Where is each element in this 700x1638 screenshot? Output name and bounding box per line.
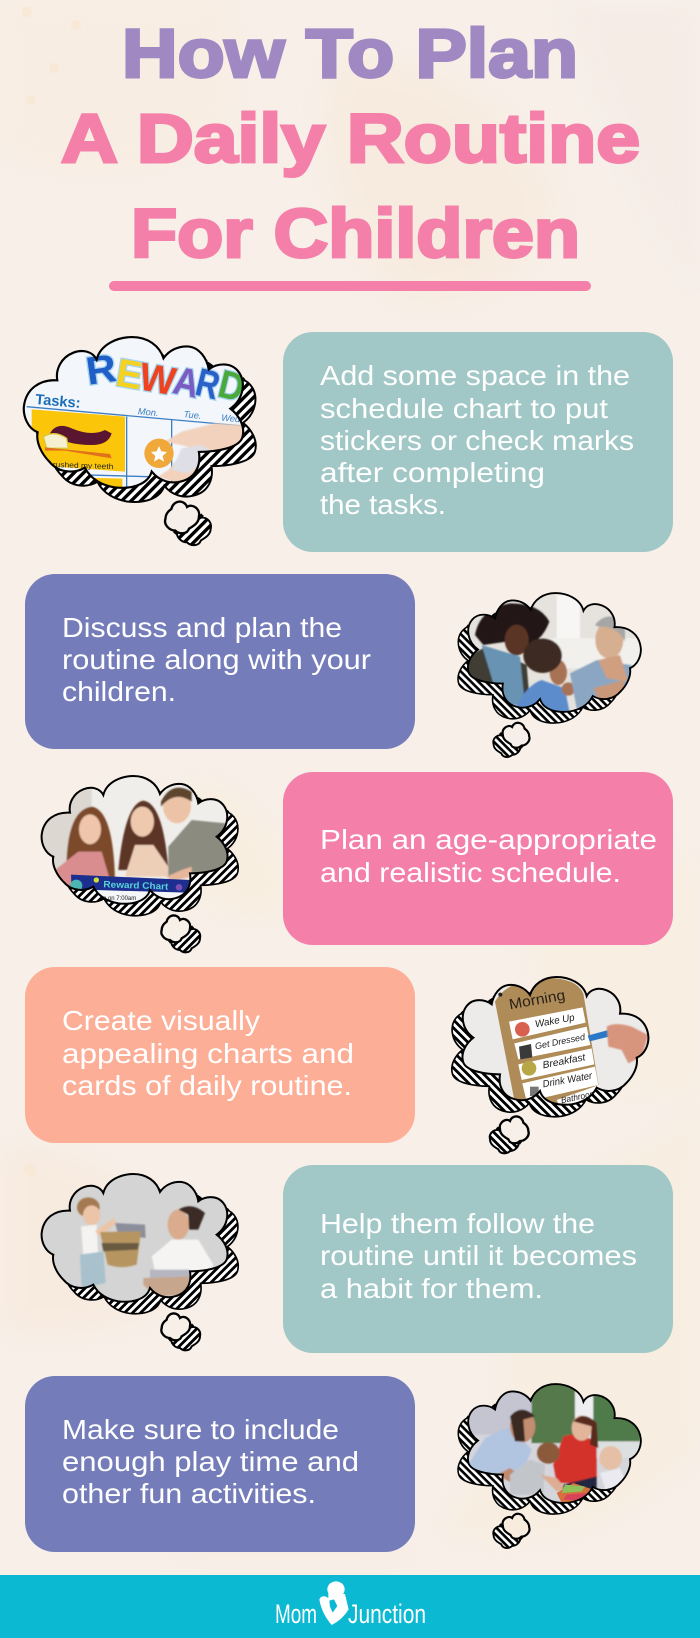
title (61, 15, 640, 291)
tip text: schedule chart to put (320, 393, 608, 424)
photo: family playing (468, 1385, 640, 1502)
tip text: children. (62, 676, 176, 707)
card (25, 1376, 415, 1552)
tip text: Make sure to include (62, 1414, 339, 1445)
logo icon: mother and child heart (319, 1581, 349, 1625)
tip text (62, 1005, 354, 1101)
panel: plan together tip (25, 574, 415, 749)
photo: reward chart: Tue. (183, 409, 202, 421)
tip text: Create visually (62, 1005, 260, 1036)
tip text (320, 1208, 637, 1304)
bubble shadow (52, 790, 240, 917)
panel: build a habit tip (283, 1165, 673, 1353)
tip text (62, 612, 371, 707)
photo: morning chart: Bathroom (560, 1088, 597, 1105)
tip text: enough play time and (62, 1446, 359, 1477)
photo: reward chart: I brushed my teeth (43, 460, 114, 471)
small thought cloud (160, 914, 202, 954)
small thought cloud (164, 500, 212, 546)
card (25, 574, 415, 749)
card (25, 967, 415, 1143)
photo: morning chart: Morning (508, 988, 566, 1013)
photo: morning chart: Drink Water (542, 1071, 594, 1090)
bubble outline (42, 776, 228, 904)
title line: A Daily Routine: A Daily Routine (61, 100, 640, 177)
panel: realistic schedule tip (283, 772, 673, 945)
small thought cloud (492, 1512, 531, 1549)
thought bubble: reward chart photo (22, 336, 257, 546)
panel: stickers tip (283, 332, 673, 552)
title line: For Children: For Children (131, 195, 580, 272)
photo: reward chart: E (113, 351, 146, 398)
thought bubble: morning routine card photo (450, 976, 650, 1154)
bubble shadow (36, 354, 257, 503)
tip text (62, 1414, 359, 1509)
bubble outline (468, 593, 641, 712)
bubble shadow (457, 606, 632, 724)
footer band (0, 1575, 700, 1638)
photo: reward chart: Mon. (137, 406, 159, 418)
photo: parents and child (468, 594, 640, 711)
photo: reward chart (25, 338, 242, 487)
tip text: the tasks. (320, 489, 446, 520)
tip text: Add some space in the (320, 360, 630, 391)
panel: visual charts tip (25, 967, 415, 1143)
tip text: routine until it becomes (320, 1240, 637, 1271)
thought bubble: family discussion photo (457, 592, 642, 758)
bubble outline (42, 1174, 228, 1302)
title underline (109, 281, 591, 291)
tip text: routine along with your (62, 644, 371, 675)
tip text: Help them follow the (320, 1208, 595, 1239)
tip text: after completing (320, 457, 545, 488)
bubble outline (468, 1384, 641, 1503)
photo: three children: Reward Chart (103, 879, 169, 892)
tip text: cards of daily routine. (62, 1070, 352, 1101)
bubble shadow (450, 991, 638, 1118)
bubble shadow (457, 1397, 632, 1515)
logo wordmark (275, 1599, 426, 1629)
photo: reward chart: W (136, 355, 180, 404)
bubble outline (24, 337, 243, 488)
tip text: and realistic schedule. (320, 857, 621, 888)
logo: MomJunction (275, 1581, 426, 1629)
photo: reward chart: Wed. (221, 413, 243, 425)
photo: three children: Get up on 7:00am (88, 896, 136, 902)
photo: morning chart: Breakfast (542, 1052, 588, 1071)
panel: play time tip (25, 1376, 415, 1552)
photo: reward chart: D (214, 362, 249, 411)
photo: morning chart: Get Dressed (534, 1032, 587, 1051)
photo: mother and child (42, 1175, 226, 1301)
tip text (320, 360, 634, 520)
photo: morning chart (464, 978, 648, 1104)
logo wordmark: Mom (275, 1599, 317, 1629)
photo: reward chart: R (191, 360, 224, 408)
tip text: stickers or check marks (320, 425, 634, 456)
card (283, 1165, 673, 1353)
title line: How To Plan: How To Plan (122, 15, 578, 92)
tip text: other fun activities. (62, 1478, 316, 1509)
tip text: a habit for them. (320, 1273, 543, 1304)
small thought cloud (488, 1115, 530, 1154)
photo: three children (42, 779, 227, 903)
tip text (320, 824, 657, 888)
photo: reward chart: Tasks: (35, 392, 81, 412)
photo: morning chart: Wake Up (534, 1012, 576, 1030)
photo: reward chart: A (169, 359, 203, 407)
thought bubble: mother and child with laundry photo (40, 1173, 240, 1352)
bubble shadow (52, 1188, 240, 1315)
thought bubble: family playing photo (457, 1383, 642, 1549)
card (283, 332, 673, 552)
card (283, 772, 673, 945)
small thought cloud (160, 1312, 202, 1352)
tip text: Plan an age-appropriate (320, 824, 657, 855)
bubble outline (462, 977, 648, 1105)
photo: reward chart: R (83, 346, 119, 394)
tip text: appealing charts and (62, 1038, 354, 1069)
small thought cloud (492, 722, 531, 758)
thought bubble: children with chart photo (40, 775, 240, 954)
tip text: Discuss and plan the (62, 612, 342, 643)
logo wordmark: Junction (348, 1599, 426, 1629)
